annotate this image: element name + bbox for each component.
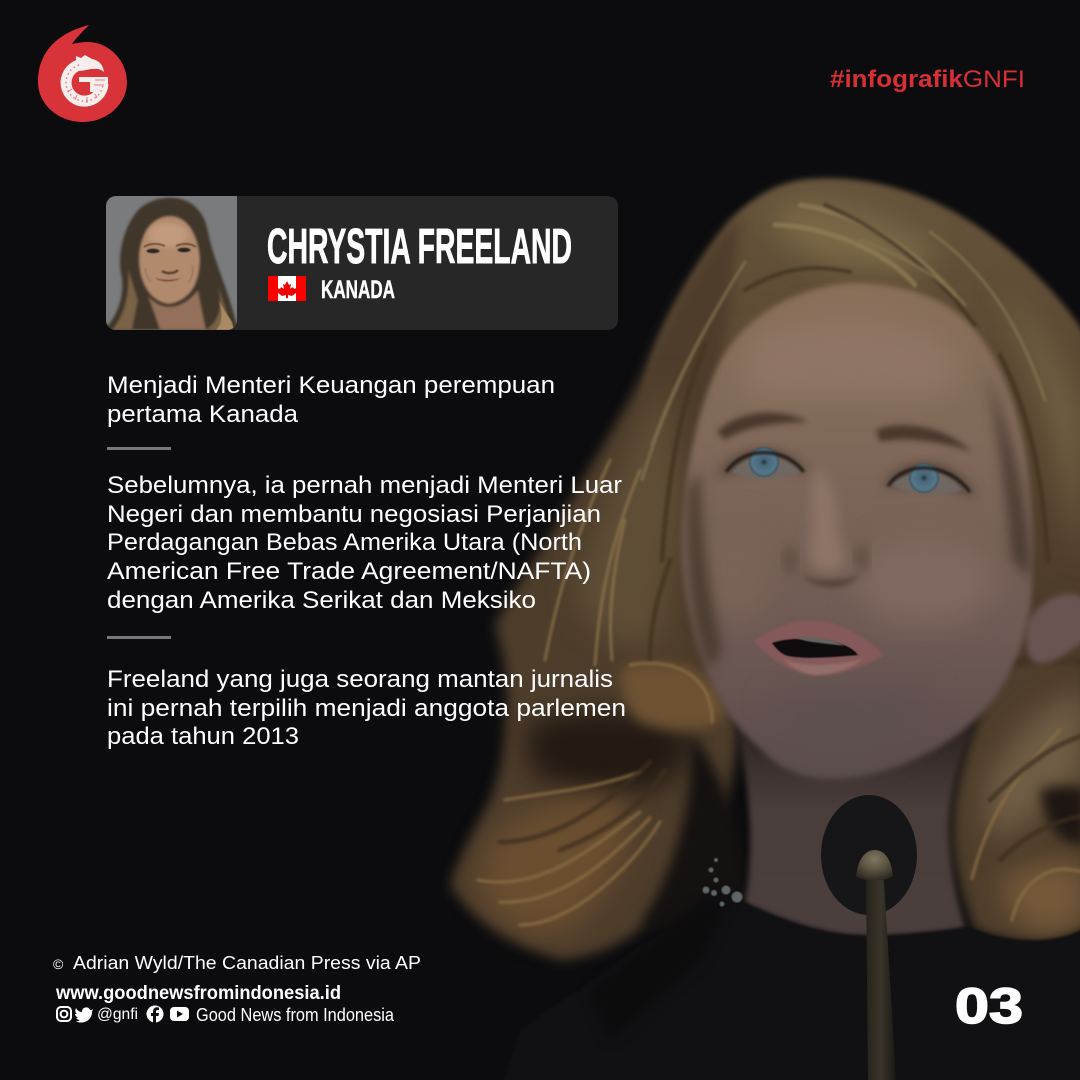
logo emblem: eagle G — [66, 55, 108, 103]
neck — [735, 725, 975, 936]
page number: 03 — [955, 978, 1023, 1034]
page name: Good News from Indonesia — [196, 1005, 395, 1025]
eyes — [715, 447, 978, 498]
text block: first fact: pertama Kanada — [107, 401, 299, 428]
text block: second fact: American Free Trade Agreement/NAFTA) — [107, 558, 591, 585]
text block: second fact: dengan Amerika Serikat dan Meksiko — [107, 587, 536, 614]
mouth — [754, 621, 884, 675]
logo mark: red swirl — [38, 25, 127, 122]
dark top — [500, 885, 1080, 1080]
face — [682, 283, 1033, 778]
text block: third fact: Freeland yang juga seorang mantan jurnalis — [107, 666, 613, 693]
text block: first fact: Menjadi Menteri Keuangan perempuan — [107, 372, 555, 399]
handle: @gnfi — [97, 1006, 138, 1023]
portrait hair — [104, 198, 238, 330]
social row — [57, 1005, 395, 1025]
portrait — [104, 196, 238, 330]
background photo: woman speaking at microphone — [450, 178, 1080, 1080]
website: www.goodnewsfromindonesia.id — [55, 983, 341, 1004]
microphone — [821, 795, 917, 1080]
face shading — [688, 314, 1032, 770]
name card — [104, 196, 618, 330]
icon: youtube — [170, 1007, 189, 1021]
flag of Canada — [268, 276, 306, 301]
text block: third fact: ini pernah terpilih menjadi anggota parlemen — [107, 695, 626, 722]
text block: first fact — [107, 372, 555, 428]
portrait neck — [148, 290, 206, 330]
ear — [1026, 594, 1080, 663]
logo — [38, 25, 127, 122]
eyebrows — [717, 413, 972, 452]
text block: second fact — [107, 472, 622, 614]
photo credit: © — [53, 956, 64, 972]
icon: facebook — [146, 1006, 164, 1023]
portrait features — [144, 244, 196, 283]
portrait face — [139, 216, 200, 304]
text block: second fact: Sebelumnya, ia pernah menjadi Menteri Luar — [107, 472, 622, 499]
icon: instagram — [57, 1007, 71, 1021]
hair mass behind face — [450, 178, 1080, 960]
card background — [106, 196, 618, 330]
text block: second fact: Negeri dan membantu negosiasi Perjanjian — [107, 501, 601, 528]
icon: twitter — [75, 1007, 93, 1023]
hashtag: #infografik GNFI — [830, 66, 1025, 93]
name: CHRYSTIA FREELAND — [267, 220, 572, 274]
text block: second fact: Perdagangan Bebas Amerika Utara (North — [107, 529, 582, 556]
collar shadow — [590, 895, 730, 1040]
pearl necklace — [702, 858, 742, 906]
hair strands — [478, 205, 1080, 925]
nose — [784, 470, 868, 587]
text block: third fact: pada tahun 2013 — [107, 723, 299, 750]
text block: third fact — [107, 666, 626, 750]
country: KANADA — [321, 276, 395, 304]
photo credit: Adrian Wyld/The Canadian Press via AP — [73, 953, 421, 973]
